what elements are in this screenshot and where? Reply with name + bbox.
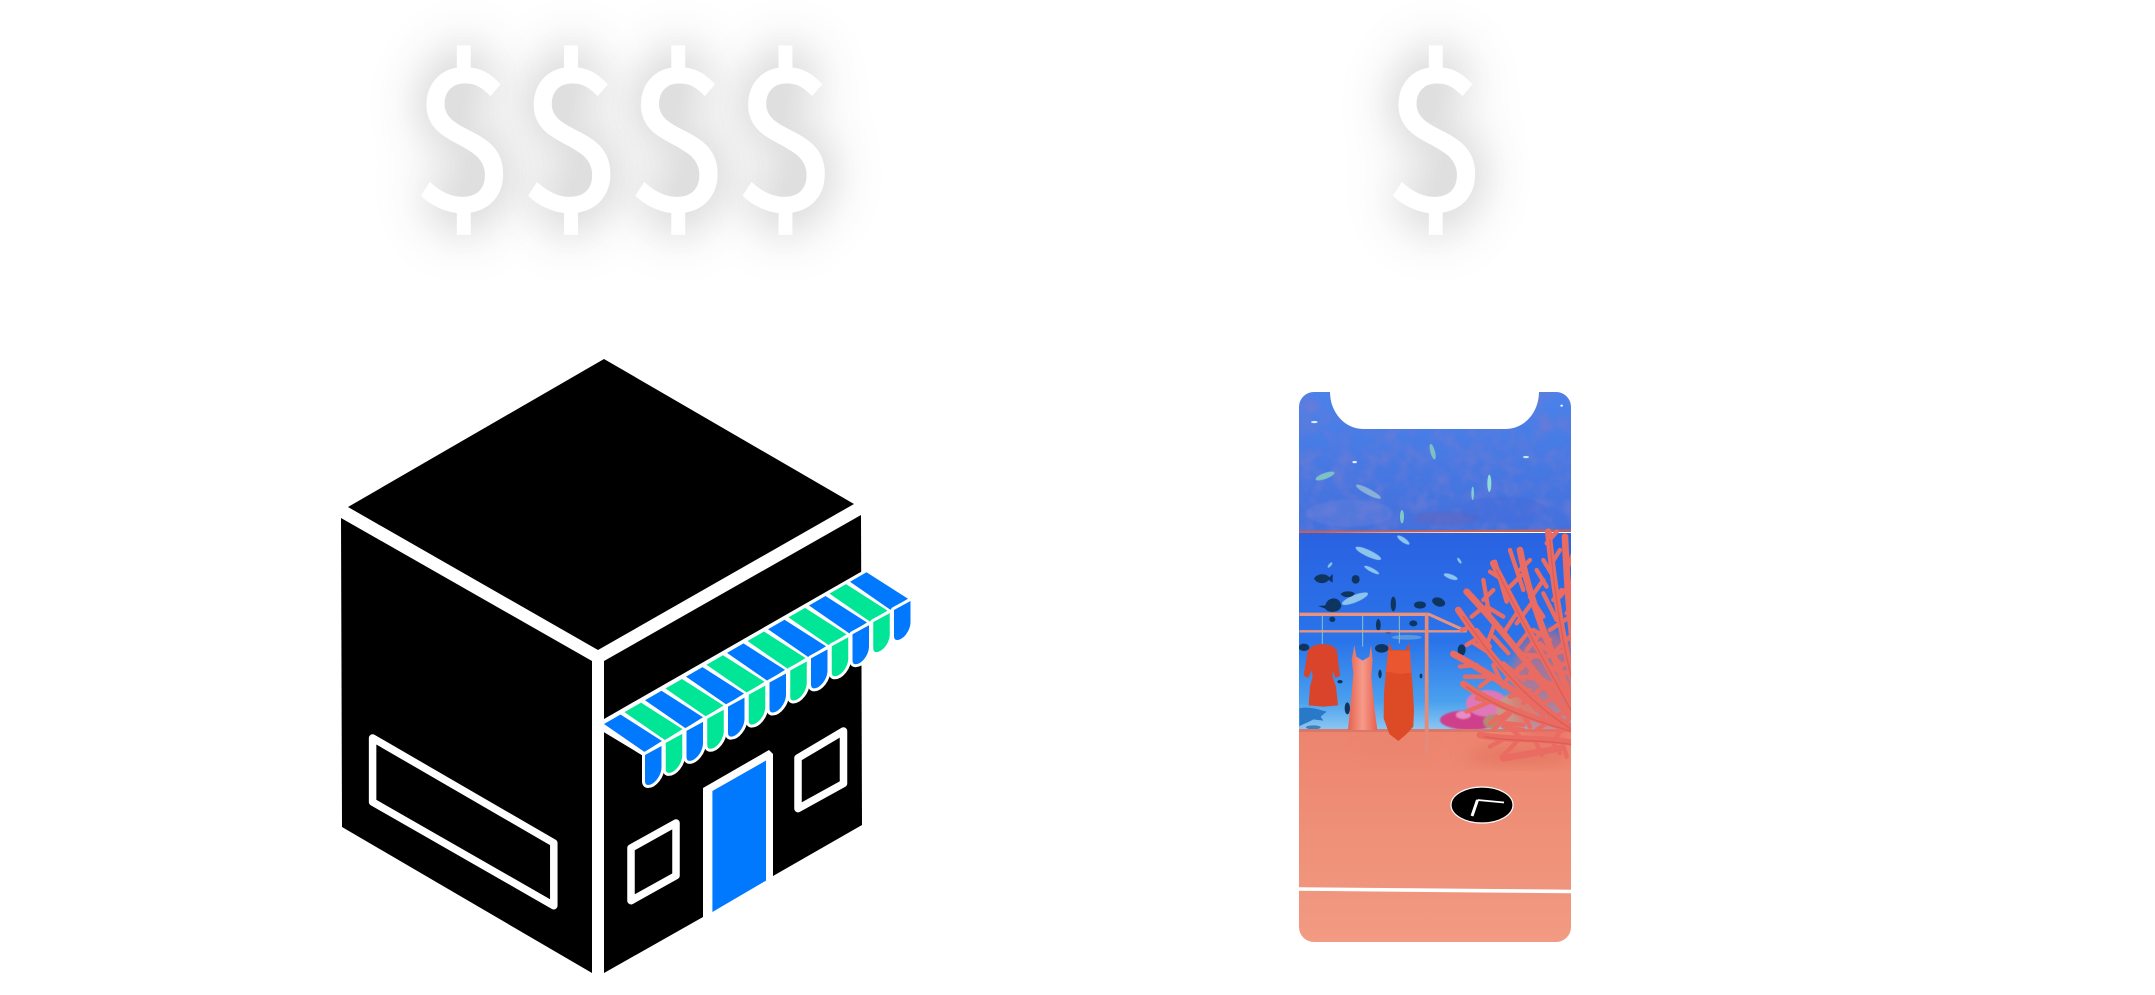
store left wall — [341, 518, 592, 973]
dark fish — [1299, 574, 1466, 714]
floor — [1299, 729, 1571, 942]
store right wall — [604, 515, 862, 973]
fish, corals and rack in aquarium, drawn in crop coordinates — [1299, 534, 1537, 730]
icon: physical store building — [341, 359, 912, 973]
blue door — [712, 760, 766, 912]
coral twigs — [1460, 532, 1577, 757]
navigation arrow badge — [1451, 787, 1513, 823]
small window right of door — [798, 731, 844, 809]
fish in upper reef — [1311, 405, 1563, 523]
phone: virtual showroom screen — [1299, 392, 1583, 942]
pale blue fish — [1327, 534, 1462, 640]
divider beam — [1299, 530, 1571, 532]
red coral — [1453, 532, 1583, 758]
coral dense core — [1510, 630, 1583, 743]
garment: belted shirt dress — [1304, 644, 1340, 707]
coral main limbs — [1453, 532, 1577, 758]
left wall sign frame — [373, 738, 554, 906]
store roof — [348, 359, 854, 650]
small window left of door — [631, 823, 676, 901]
clothing rack and garments — [1299, 613, 1467, 755]
blue reef fish — [1299, 708, 1327, 727]
garment: orange draped dress — [1384, 642, 1414, 741]
pink reef corals — [1440, 690, 1537, 730]
white floor line — [1299, 889, 1571, 892]
upper reef wall — [1299, 392, 1571, 532]
striped awning — [602, 569, 912, 785]
garment: pink slip dress — [1348, 645, 1377, 730]
hanger strings — [1322, 616, 1399, 647]
rack — [1299, 613, 1467, 755]
floor shadows — [1476, 748, 1563, 765]
aquarium water — [1299, 533, 1571, 731]
coral shading — [1463, 540, 1575, 745]
reef mottling — [1299, 392, 1571, 532]
